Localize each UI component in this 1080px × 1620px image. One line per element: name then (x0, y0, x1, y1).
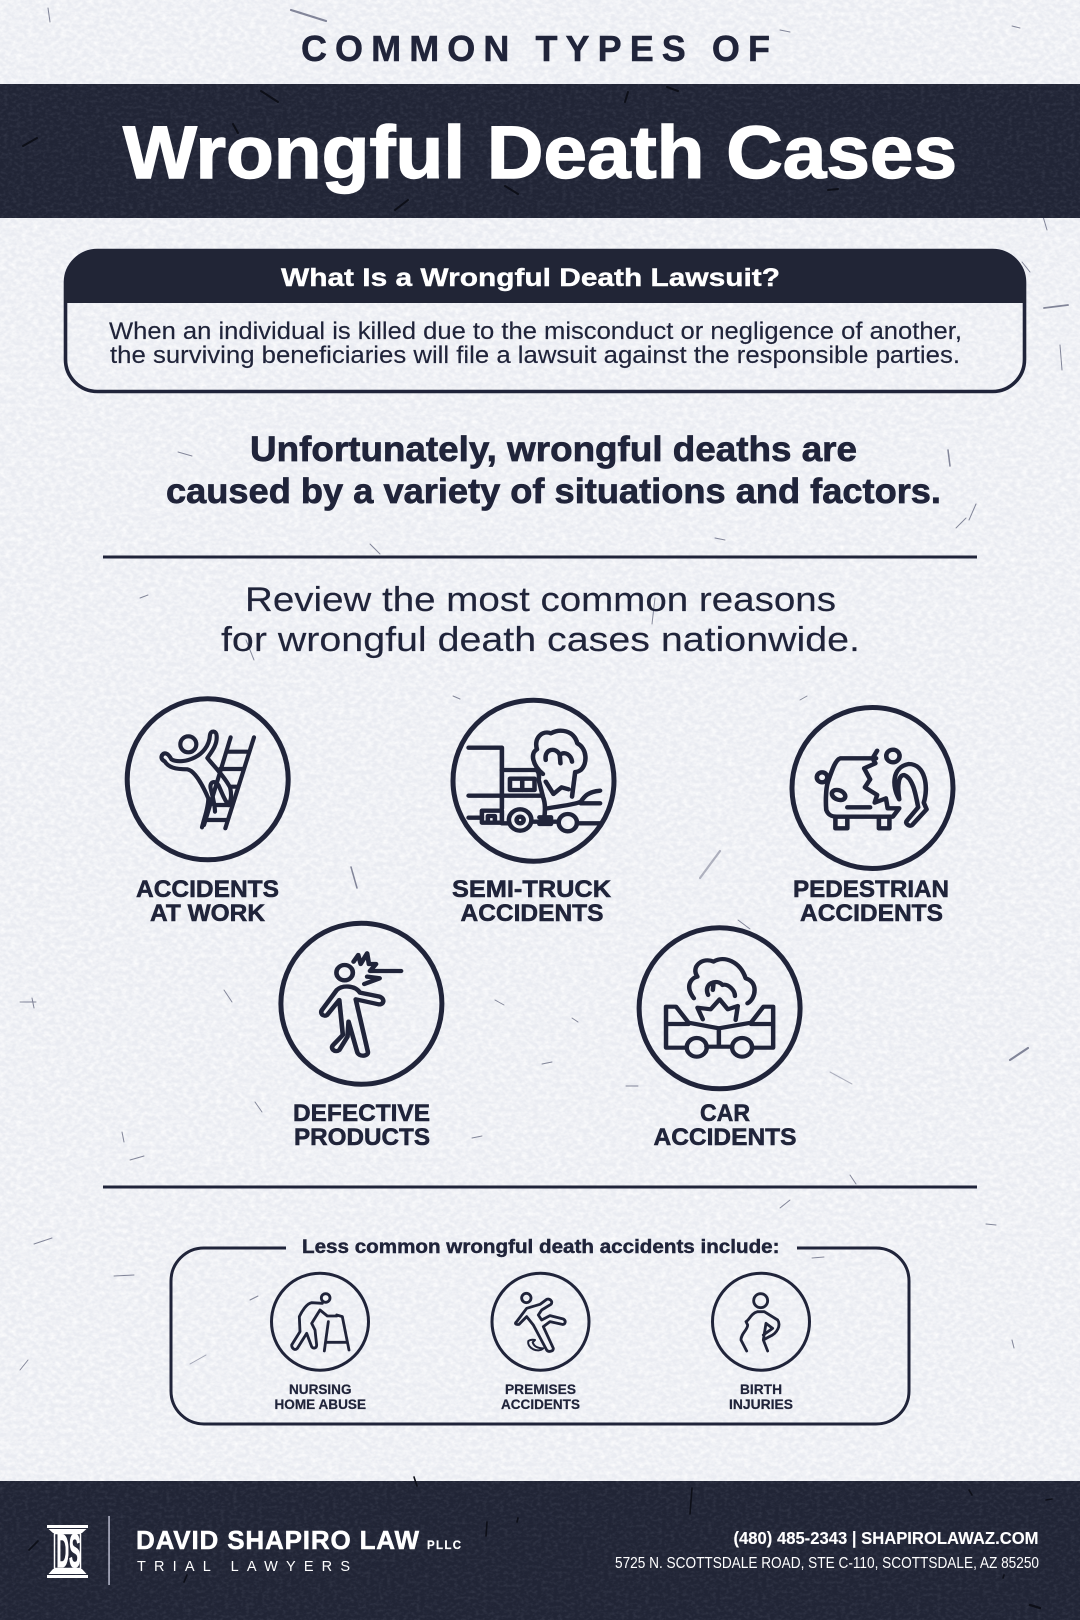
logo: column with DS monogram (47, 1525, 88, 1578)
item: nursing home abuse (272, 1273, 368, 1412)
statement text (166, 430, 941, 511)
label: PREMISES (505, 1382, 576, 1397)
icon: person slipping (492, 1273, 589, 1370)
title band (0, 84, 1080, 218)
title kicker: COMMON TYPES OF (301, 28, 770, 69)
panel: less common accidents (171, 1236, 909, 1424)
icon: elder with walker (272, 1273, 368, 1370)
cause: defective products (281, 923, 442, 1151)
label: DEFECTIVE (293, 1100, 430, 1127)
panel heading: What Is a Wrongful Death Lawsuit? (281, 264, 780, 292)
panel body text (109, 318, 962, 369)
label (654, 1100, 796, 1151)
cause: pedestrian accidents (792, 708, 953, 927)
item: premises accidents (492, 1273, 589, 1412)
statement text: caused by a variety of situations and factors. (166, 472, 941, 511)
label (501, 1382, 580, 1412)
main title: Wrongful Death Cases (123, 111, 957, 194)
label (793, 876, 949, 927)
label: INJURIES (729, 1397, 793, 1412)
panel body text: When an individual is killed due to the misconduct or negligence of another, (109, 318, 962, 345)
label: ACCIDENTS (136, 876, 279, 903)
icon: person struck by defective part (281, 923, 442, 1084)
panel body text: the surviving beneficiaries will file a lawsuit against the responsible parties. (110, 342, 960, 369)
item: birth injuries (712, 1273, 810, 1412)
icon: worker falling from ladder (127, 699, 288, 860)
cause: car accidents (639, 928, 800, 1151)
label (274, 1382, 366, 1412)
logo wordmark: TRIAL LAWYERS (137, 1559, 350, 1575)
cause: accidents at work (127, 699, 288, 927)
icon: pregnant woman (712, 1273, 810, 1370)
icon: two cars colliding (639, 928, 800, 1089)
label (136, 876, 279, 927)
logo wordmark: DAVID SHAPIRO LAW (136, 1525, 419, 1555)
label: ACCIDENTS (501, 1397, 580, 1412)
label (293, 1100, 430, 1151)
contact details: (480) 485-2343 | SHAPIROLAWAZ.COM (734, 1528, 1038, 1548)
panel: what is a wrongful death lawsuit (64, 249, 1026, 392)
label: CAR (700, 1100, 750, 1127)
label: ACCIDENTS (460, 900, 604, 927)
label (452, 876, 612, 927)
statement text: Unfortunately, wrongful deaths are (250, 430, 857, 469)
intro text: Review the most common reasons (245, 581, 836, 619)
label: AT WORK (150, 900, 266, 927)
label (729, 1382, 793, 1412)
label: NURSING (289, 1382, 352, 1397)
panel heading: Less common wrongful death accidents include: (302, 1236, 780, 1258)
contact details (615, 1528, 1039, 1572)
label: ACCIDENTS (654, 1124, 796, 1151)
intro text: for wrongful death cases nationwide. (221, 621, 860, 659)
logo wordmark (136, 1525, 461, 1575)
footer band (0, 1477, 1080, 1620)
intro text (221, 581, 860, 659)
cause: semi-truck accidents (452, 700, 614, 927)
logo: column with DS monogram: DS (56, 1525, 81, 1578)
label: PRODUCTS (294, 1124, 430, 1151)
label: ACCIDENTS (800, 900, 943, 927)
label: SEMI-TRUCK (452, 876, 612, 903)
label: PEDESTRIAN (793, 876, 949, 903)
label: HOME ABUSE (274, 1397, 366, 1412)
icon: car hitting pedestrian (792, 708, 953, 868)
icon: truck and car collision with smoke (453, 700, 614, 861)
label: BIRTH (740, 1382, 782, 1397)
logo wordmark: PLLC (427, 1540, 461, 1552)
